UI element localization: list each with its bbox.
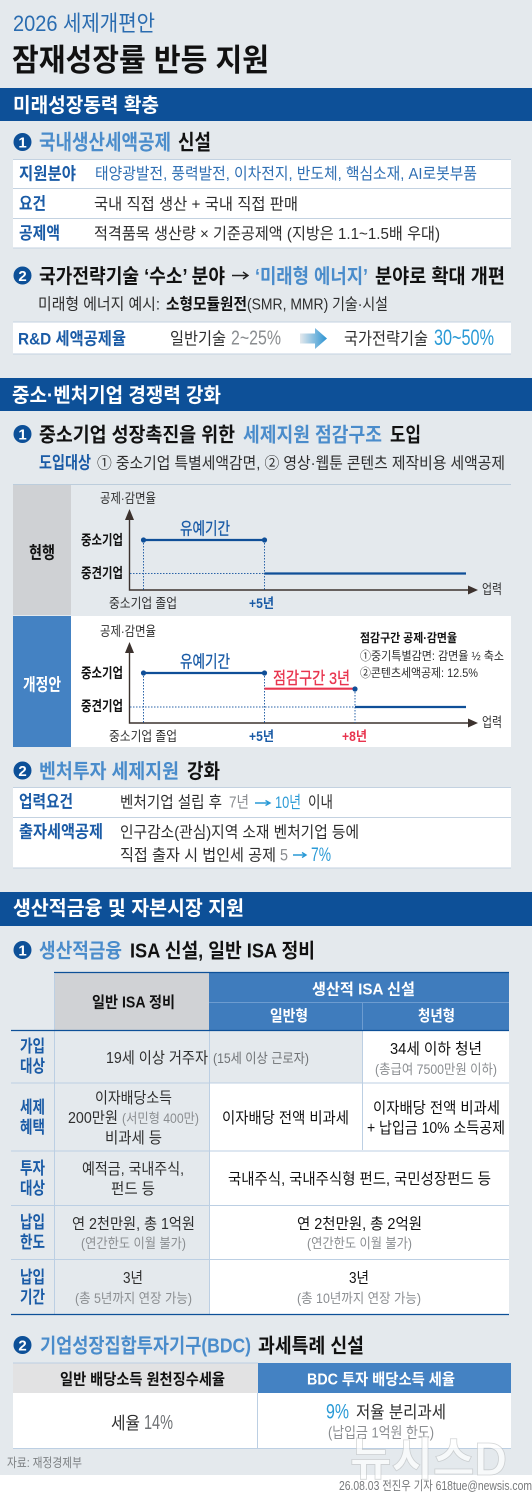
heading: BDC tax exception: 과세특례 신설 xyxy=(258,1334,364,1358)
section band: future growth xyxy=(0,88,532,121)
table header: 생산적 ISA 신설 xyxy=(312,980,415,998)
row: contribution limit: 한도 xyxy=(20,1233,45,1252)
row: tax benefits: (서민형 400만) xyxy=(122,1111,199,1126)
heading: tapering tax support structure xyxy=(14,424,421,446)
row: contribution limit xyxy=(20,1213,422,1252)
chart: revised proposal: 공제·감면율 xyxy=(100,624,156,639)
chart: revised proposal: 업력 xyxy=(482,715,502,730)
row: tax benefits: 비과세 등 xyxy=(105,1129,162,1147)
chart: current system: 중견기업 xyxy=(81,565,123,581)
row: contribution period: 기간 xyxy=(20,1288,45,1307)
row: investment targets: 투자 xyxy=(20,1159,45,1178)
row: eligibility xyxy=(20,1037,497,1077)
text: future energy examples: 소형모듈원전 xyxy=(166,296,247,314)
table: venture tax support: 출자세액공제 xyxy=(19,822,103,842)
chart: revised proposal: 중소기업 졸업 xyxy=(109,729,177,744)
callout: taper-period rates: 점감구간 공제·감면율 xyxy=(360,630,457,645)
chart: current system: 현행 xyxy=(29,544,55,562)
heading: tapering tax support structure: 1 xyxy=(18,426,27,444)
table header: 청년형 xyxy=(418,1007,455,1025)
table: BDC dividend tax: 세율 xyxy=(111,1414,140,1433)
panel: R&D tax credit rate xyxy=(13,322,511,354)
table: domestic production credit xyxy=(13,160,511,248)
table: BDC dividend tax xyxy=(13,1363,511,1448)
text: introduction targets: ① 중소기업 특별세액감면, ② 영상·웹툰 콘텐츠 제작비용 세액공제 xyxy=(97,454,505,472)
table: ISA comparison xyxy=(11,972,509,1314)
heading: venture investment: 2 xyxy=(18,763,27,780)
row: tax benefits: 이자배당 전액 비과세 xyxy=(222,1109,349,1127)
chart: revised proposal: +8년 xyxy=(342,729,367,744)
row: eligibility: (15세 이상 근로자) xyxy=(213,1051,309,1066)
table: BDC dividend tax: BDC 투자 배당소득 세율 xyxy=(307,1370,455,1388)
callout: taper-period rates: ②콘텐츠세액공제: 12.5% xyxy=(360,666,478,680)
table: venture tax support: 인구감소(관심)지역 소재 벤처기업 등에 xyxy=(120,824,359,842)
panel: R&D tax credit rate: 30~50% xyxy=(434,325,494,350)
table: venture tax support: 이내 xyxy=(308,794,333,812)
row: eligibility: (총급여 7500만원 이하) xyxy=(375,1062,497,1077)
main title: 잠재성장률 반등 지원 xyxy=(12,43,269,78)
watermark: Newsis logo: 뉴시스D xyxy=(350,1433,507,1485)
row: contribution period: (총 5년까지 연장 가능) xyxy=(75,1291,192,1306)
table: venture tax support: 업력요건 xyxy=(19,792,73,812)
title block xyxy=(12,11,269,78)
heading: BDC tax exception: 기업성장집합투자기구(BDC) xyxy=(40,1334,251,1358)
chart: revised proposal: 유예기간 xyxy=(180,652,230,672)
table: venture tax support: 5 xyxy=(280,846,288,864)
row: investment targets: 예적금, 국내주식, xyxy=(82,1160,184,1178)
table: BDC dividend tax: 9% xyxy=(326,1400,349,1424)
table: BDC dividend tax: 일반 배당소득 원천징수세율 xyxy=(60,1370,225,1388)
section band: productive finance: 생산적금융 및 자본시장 지원 xyxy=(13,897,244,920)
row: eligibility: 대상 xyxy=(20,1057,45,1076)
text: introduction targets: 도입대상 xyxy=(39,454,91,472)
section band: SMEs and ventures xyxy=(0,378,532,411)
row: tax benefits: 이자배당소득 xyxy=(95,1089,172,1107)
text: future energy examples xyxy=(38,296,388,314)
heading: venture investment: 벤처투자 세제지원 xyxy=(39,760,179,783)
heading: BDC tax exception xyxy=(14,1334,364,1358)
heading: domestic production tax credit: 국내생산세액공제 xyxy=(39,132,171,154)
callout: taper-period rates xyxy=(360,630,504,680)
arrow xyxy=(232,272,248,279)
chart: revised proposal: 개정안 xyxy=(23,676,61,694)
chart: current system: 공제·감면율 xyxy=(100,491,156,506)
table: domestic production credit: 요건 xyxy=(19,194,46,214)
table: domestic production credit: 지원분야 xyxy=(19,164,76,184)
row: investment targets: 대상 xyxy=(20,1179,45,1198)
supertitle: 2026 세제개편안 xyxy=(13,11,155,36)
row: contribution period: (총 10년까지 연장 가능) xyxy=(297,1291,421,1306)
table header: 일반 ISA 정비 xyxy=(92,994,175,1012)
heading: domestic production tax credit: 신설 xyxy=(178,132,211,154)
heading: productive finance ISA: ISA 신설, 일반 ISA 정비 xyxy=(130,940,315,962)
row: investment targets: 펀드 등 xyxy=(111,1180,155,1198)
chart: revised proposal xyxy=(13,616,511,747)
row: eligibility: 34세 이하 청년 xyxy=(390,1040,482,1058)
table header: 일반형 xyxy=(270,1007,308,1025)
row: contribution period: 3년 xyxy=(123,1269,143,1287)
heading: productive finance ISA: 1 xyxy=(18,942,27,960)
source note: 자료: 재정경제부 xyxy=(7,1456,82,1470)
heading: tapering tax support structure: 세제지원 점감구조 xyxy=(243,424,382,446)
heading: national strategic technology: 국가전략기술 ‘수소’ 분야 xyxy=(39,265,225,288)
row: investment targets: 국내주식, 국내주식형 펀드, 국민성장펀드 등 xyxy=(228,1170,491,1188)
panel: R&D tax credit rate: 국가전략기술 xyxy=(344,330,428,348)
row: tax benefits: 200만원 xyxy=(68,1109,118,1127)
chart: current system: 중소기업 xyxy=(81,532,123,548)
heading: venture investment: 강화 xyxy=(187,760,220,783)
axes xyxy=(130,515,470,590)
panel: R&D tax credit rate: 일반기술 xyxy=(170,330,226,348)
text: future energy examples: (SMR, MMR) 기술·시설 xyxy=(247,296,388,314)
axes xyxy=(130,648,470,723)
chart: current system: +5년 xyxy=(249,596,274,611)
row: contribution period: 3년 xyxy=(349,1269,369,1287)
row: contribution period: 납입 xyxy=(20,1268,45,1287)
table: domestic production credit: 태양광발전, 풍력발전, 이차전지, 반도체, 핵심소재, AI로봇부품 xyxy=(95,165,477,183)
table: domestic production credit: 공제액 xyxy=(19,224,60,243)
row: contribution limit: (연간한도 이월 불가) xyxy=(81,1236,186,1251)
table: BDC dividend tax: (납입금 1억원 한도) xyxy=(328,1424,434,1442)
heading: national strategic technology: 2 xyxy=(18,268,27,285)
panel: R&D tax credit rate: 2~25% xyxy=(231,328,281,350)
row: tax benefits: + 납입금 10% 소득공제 xyxy=(367,1119,505,1137)
section band: productive finance xyxy=(0,892,532,926)
callout: taper-period rates: ①중기특별감면: 감면율 ½ 축소 xyxy=(360,649,504,663)
row: contribution limit: 연 2천만원, 총 2억원 xyxy=(297,1215,422,1233)
chart: revised proposal: 중견기업 xyxy=(81,698,123,714)
heading: tapering tax support structure: 중소기업 성장촉진을 위한 xyxy=(39,424,235,446)
chart: current system: 중소기업 졸업 xyxy=(109,596,177,611)
heading: national strategic technology: ‘미래형 에너지’ xyxy=(255,265,368,288)
row: contribution period xyxy=(20,1268,421,1307)
row: contribution limit: 연 2천만원, 총 1억원 xyxy=(72,1215,195,1233)
heading: BDC tax exception: 2 xyxy=(18,1338,27,1354)
table: venture tax support: 7% xyxy=(311,845,331,866)
chart: revised proposal: 중소기업 xyxy=(81,665,123,681)
section band: future growth: 미래성장동력 확충 xyxy=(13,94,159,117)
row: tax benefits: 이자배당 전액 비과세 xyxy=(373,1099,500,1117)
heading: productive finance ISA: 생산적금융 xyxy=(39,940,122,962)
chart: revised proposal: +5년 xyxy=(249,729,274,744)
heading: tapering tax support structure: 도입 xyxy=(390,424,421,446)
table: venture tax support: 7년 xyxy=(229,794,249,812)
chart: current system: 유예기간 xyxy=(180,520,230,538)
heading: national strategic technology xyxy=(14,265,505,288)
chart: revised proposal: 점감구간 3년 xyxy=(273,669,350,688)
table: domestic production credit: 적격품목 생산량 × 기준공제액 (지방은 1.1~1.5배 우대) xyxy=(94,225,440,243)
table header xyxy=(54,972,509,1030)
row: tax benefits: 세제 xyxy=(20,1098,45,1117)
heading: productive finance ISA xyxy=(14,940,315,962)
table: BDC dividend tax: 14% xyxy=(144,1412,173,1434)
table: venture tax support: 직접 출자 시 법인세 공제 xyxy=(120,846,276,864)
heading: national strategic technology: 분야로 확대 개편 xyxy=(375,265,505,288)
heading: domestic production tax credit: 1 xyxy=(18,134,27,152)
panel: R&D tax credit rate: R&D 세액공제율 xyxy=(18,330,126,348)
chart: current system xyxy=(13,484,511,615)
row: contribution limit: (연간한도 이월 불가) xyxy=(307,1236,412,1251)
section band: SMEs and ventures: 중소·벤처기업 경쟁력 강화 xyxy=(12,384,221,407)
row: investment targets xyxy=(20,1159,491,1198)
table: venture tax support xyxy=(13,788,511,868)
arrow xyxy=(300,328,327,349)
table: domestic production credit: 국내 직접 생산 + 국내 직접 판매 xyxy=(94,196,298,214)
table: BDC dividend tax: 저율 분리과세 xyxy=(356,1403,446,1422)
text: future energy examples: 미래형 에너지 예시: xyxy=(38,296,160,314)
row: eligibility: 가입 xyxy=(20,1037,45,1056)
chart: current system: 업력 xyxy=(482,582,502,597)
row: tax benefits xyxy=(20,1089,505,1147)
table: venture tax support: 벤처기업 설립 후 xyxy=(120,794,222,812)
row: contribution limit: 납입 xyxy=(20,1213,45,1232)
row: tax benefits: 혜택 xyxy=(20,1118,45,1137)
table: venture tax support: 10년 xyxy=(275,793,301,812)
row: eligibility: 19세 이상 거주자 xyxy=(106,1049,208,1067)
